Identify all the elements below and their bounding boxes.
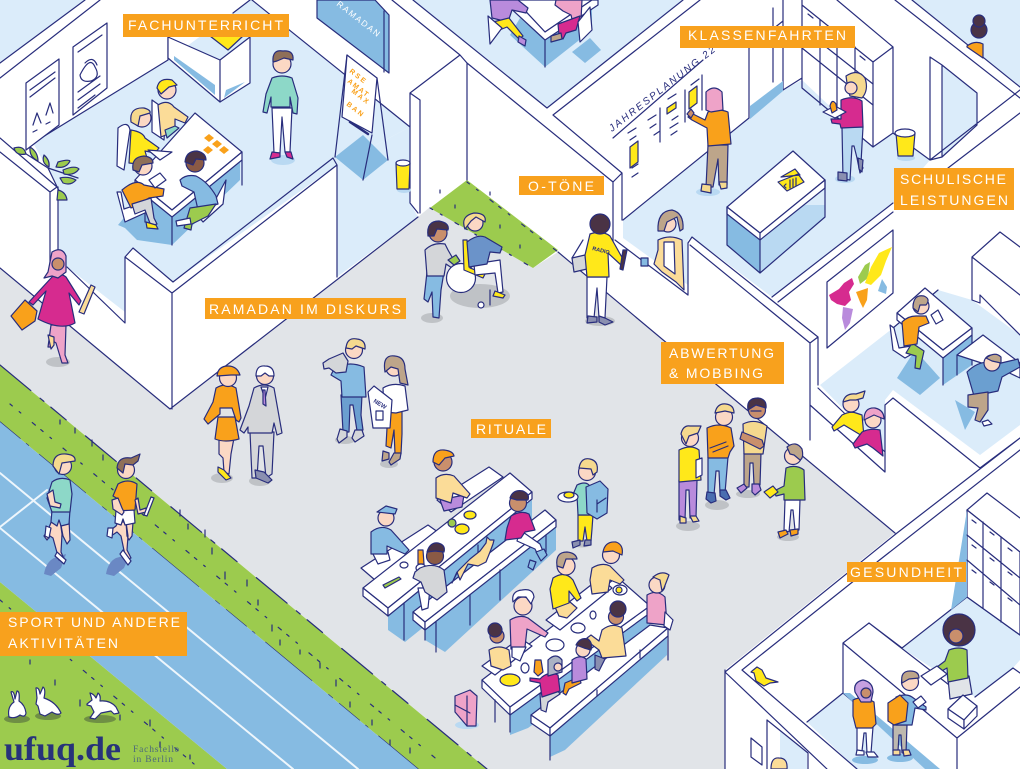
diner: blonde, pink top	[647, 573, 673, 630]
label: Schulische Leistungen: SCHULISCHE	[900, 171, 1006, 187]
door and shadow floor	[750, 81, 783, 119]
label: Abwertung und Mobbing: & MOBBING	[669, 365, 763, 381]
classroom table	[118, 113, 242, 245]
diner: magenta top	[505, 491, 547, 570]
flipchart: BAN	[345, 101, 366, 120]
trash can	[895, 129, 915, 161]
flipchart: MAX	[350, 88, 371, 107]
label: Fachunterricht	[123, 14, 289, 37]
label: Klassenfahrten	[680, 26, 855, 48]
man with salad	[421, 221, 460, 323]
label: Schulische Leistungen	[894, 168, 1014, 210]
poster: right	[73, 23, 107, 115]
child with plate and backpack	[558, 459, 608, 548]
logo: ufuq.de: ufuq.de	[4, 731, 121, 768]
picnic table 1 and benches	[361, 467, 556, 652]
logo: ufuq.de: Fachstelle	[133, 745, 179, 755]
door bottom	[751, 720, 808, 769]
kids at window	[832, 391, 884, 456]
label: Klassenfahrten: KLASSENFAHRTEN	[688, 27, 846, 43]
flipchart: AMAT	[346, 78, 370, 99]
diner: orange hair	[590, 542, 624, 594]
lawn strip with grass	[0, 180, 558, 769]
runner: teal shirt	[44, 454, 75, 576]
label: O-Töne	[519, 176, 604, 195]
wastebasket left	[396, 160, 411, 193]
head in doorway	[771, 758, 787, 769]
radio reporter	[572, 214, 627, 326]
woman in wheelchair	[446, 213, 510, 308]
bird	[751, 667, 778, 686]
student: backpack	[887, 671, 926, 762]
student: purple hijab	[852, 680, 878, 764]
radio reporter: RADIO	[592, 246, 611, 256]
label: Abwertung und Mobbing: ABWERTUNG	[669, 345, 774, 361]
pink backpack	[455, 690, 479, 729]
diner: grey hair, pink top	[510, 590, 548, 661]
rabbits	[4, 687, 119, 723]
student: orange top, crossed arms	[705, 404, 734, 510]
label: Ramadan im Diskurs: RAMADAN IM DISKURS	[209, 301, 401, 317]
child: curly hair	[488, 623, 511, 670]
diner: orange cap	[433, 450, 470, 511]
diner: curly dark hair	[587, 601, 626, 671]
box	[948, 695, 977, 729]
label: O-Töne: O-TÖNE	[528, 177, 594, 194]
student: blue top	[176, 151, 226, 230]
poster: left	[26, 59, 59, 150]
couple	[204, 366, 282, 486]
student: glasses and crossed arms	[736, 398, 767, 498]
student: green top with gift	[764, 444, 805, 541]
student: yellow cap	[152, 79, 188, 140]
teacher at window	[641, 210, 684, 290]
plaza ground	[0, 207, 895, 769]
cabinet	[168, 36, 250, 102]
sleeping student at desk	[955, 335, 1020, 430]
running track	[0, 422, 418, 769]
teacher standing	[263, 51, 298, 165]
runner: orange shirt	[106, 454, 154, 576]
diner: gray hijab	[530, 656, 562, 712]
world map	[827, 230, 893, 348]
woman with newspaper	[368, 356, 408, 468]
student at desk	[890, 288, 972, 395]
wall display: Jahresplanung: JAHRESPLANUNG 22	[606, 43, 719, 135]
logo: ufuq.de	[4, 731, 179, 768]
ticket table	[727, 151, 825, 273]
logo: ufuq.de: in Berlin	[133, 755, 173, 765]
label: Rituale: RITUALE	[476, 421, 546, 437]
flipchart: RSE	[348, 68, 368, 86]
label: Fachunterricht: FACHUNTERRICHT	[128, 17, 283, 33]
diner: yellow hoodie	[550, 552, 581, 618]
student: blond yellow top	[676, 426, 702, 531]
cat	[452, 537, 494, 583]
cameraman	[323, 339, 366, 444]
lockers top right	[802, 14, 873, 132]
student: orange top	[117, 156, 166, 229]
person behind wall	[967, 15, 987, 58]
student: yellow top	[117, 108, 172, 170]
top classroom table	[488, 0, 601, 67]
board: RAMADAN	[317, 0, 389, 73]
woman with hijab and briefcase	[11, 250, 95, 367]
label: Gesundheit: GESUNDHEIT	[850, 564, 962, 580]
woman with tray	[823, 72, 866, 183]
picnic table 2 and benches	[482, 577, 668, 760]
woman with newspaper: NEW	[372, 399, 387, 411]
label: Schulische Leistungen: LEISTUNGEN	[900, 192, 1008, 208]
diner: gray top	[413, 543, 447, 610]
flipchart	[335, 55, 388, 180]
child: purple top	[563, 639, 592, 695]
diner: blue cap	[371, 506, 409, 564]
label: Sport und andere Aktivitäten: SPORT UND ANDERE	[8, 614, 180, 630]
label: Sport und andere Aktivitäten: AKTIVITÄTEN	[8, 635, 118, 651]
woman planning at wall	[687, 88, 731, 196]
nurse	[921, 614, 975, 699]
label: Sport und andere Aktivitäten	[0, 612, 187, 656]
plant	[14, 147, 79, 200]
wall display: Jahresplanung	[606, 43, 719, 177]
lockers bottom right	[843, 510, 1020, 769]
label: Abwertung und Mobbing	[661, 342, 784, 384]
